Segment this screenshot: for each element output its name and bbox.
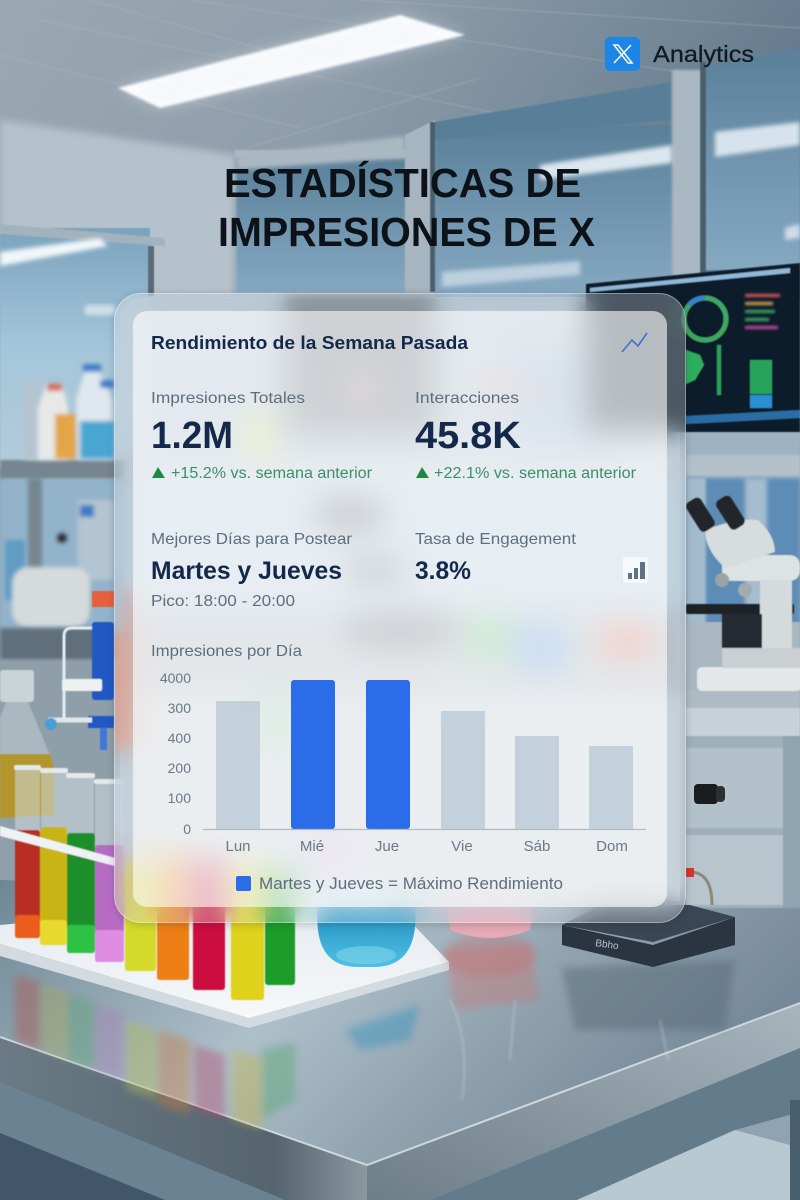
- light streaks on table: [450, 1000, 668, 1100]
- knob and cable: [686, 784, 725, 905]
- icon: bar chart badge: [623, 557, 648, 583]
- panel: white translucent card: [133, 311, 667, 907]
- glass apparatus and burette: [45, 591, 114, 750]
- y axis labels: 400: [168, 730, 191, 746]
- metric: tasa de engagement: 3.8%: [415, 557, 471, 585]
- x axis labels: Dom: [596, 838, 628, 855]
- y axis labels: 4000: [160, 670, 191, 686]
- tube reflections on table: [15, 945, 735, 1130]
- black device: Bbho: [595, 938, 620, 952]
- ceiling: [0, 0, 800, 300]
- metric: impresiones totales: +15.2% vs. semana anterior: [171, 465, 372, 482]
- logo: X Analytics: [605, 37, 754, 71]
- bar chart: impresiones por día: [151, 643, 646, 855]
- metric: interacciones: 45.8K: [415, 415, 522, 457]
- metric: mejores días: [151, 531, 353, 610]
- metric: impresiones totales: [151, 390, 372, 482]
- metric: interacciones: +22.1% vs. semana anterior: [434, 465, 636, 482]
- x axis labels: Vie: [451, 838, 473, 855]
- metric: mejores días: Pico: 18:00 - 20:00: [151, 593, 295, 610]
- y axis labels: 200: [168, 760, 191, 776]
- bar chart: impresiones por día: Impresiones por Día: [151, 643, 302, 660]
- bars: [216, 680, 633, 829]
- y axis labels: 0: [183, 821, 191, 837]
- rack for test tubes: [0, 890, 449, 1028]
- metric: impresiones totales: 1.2M: [151, 415, 233, 457]
- y axis labels: [160, 670, 191, 837]
- title: ESTADÍSTICAS DE: [224, 160, 581, 206]
- icon: trend line: [622, 333, 647, 352]
- metric: tasa de engagement: [415, 531, 577, 585]
- x axis labels: [225, 838, 628, 855]
- x axis labels: Mié: [300, 838, 324, 855]
- x axis labels: Jue: [375, 838, 399, 855]
- test tubes row behind panel edge: [0, 765, 295, 1000]
- flask with amber liquid: [0, 670, 54, 818]
- pink flask and reflection: [444, 905, 536, 977]
- metric: tasa de engagement: Tasa de Engagement: [415, 531, 577, 548]
- heading: card title: Rendimiento de la Semana Pasada: [151, 332, 469, 353]
- black device: [562, 905, 735, 967]
- steel table: [0, 880, 800, 1200]
- doorway: [0, 224, 165, 468]
- cyan flask: [317, 905, 415, 967]
- metric: mejores días: Mejores Días para Postear: [151, 531, 353, 548]
- title: IMPRESIONES DE X: [218, 209, 595, 255]
- mid scene behind panel: [116, 297, 680, 925]
- microscope: [684, 494, 800, 691]
- panel: frosted glass frame: [114, 293, 686, 923]
- back wall and windows: [0, 48, 800, 300]
- metric: interacciones: [415, 390, 636, 482]
- x axis labels: Lun: [225, 838, 251, 855]
- metric: mejores días: Martes y Jueves: [151, 557, 342, 585]
- y axis labels: 100: [168, 790, 191, 806]
- legend: Martes y Jueves = Máximo Rendimiento: [259, 875, 563, 893]
- metric: interacciones: Interacciones: [415, 390, 519, 407]
- metric: impresiones totales: Impresiones Totales: [151, 390, 305, 407]
- monitor: [586, 263, 800, 432]
- x axis labels: Sáb: [524, 838, 550, 855]
- title: [218, 160, 595, 255]
- left shelf with bottles: [0, 364, 125, 880]
- logo: X Analytics: Analytics: [653, 41, 754, 67]
- icon: X logo: [605, 37, 640, 71]
- right window, microscope backdrop: [686, 432, 800, 908]
- y axis labels: 300: [168, 700, 191, 716]
